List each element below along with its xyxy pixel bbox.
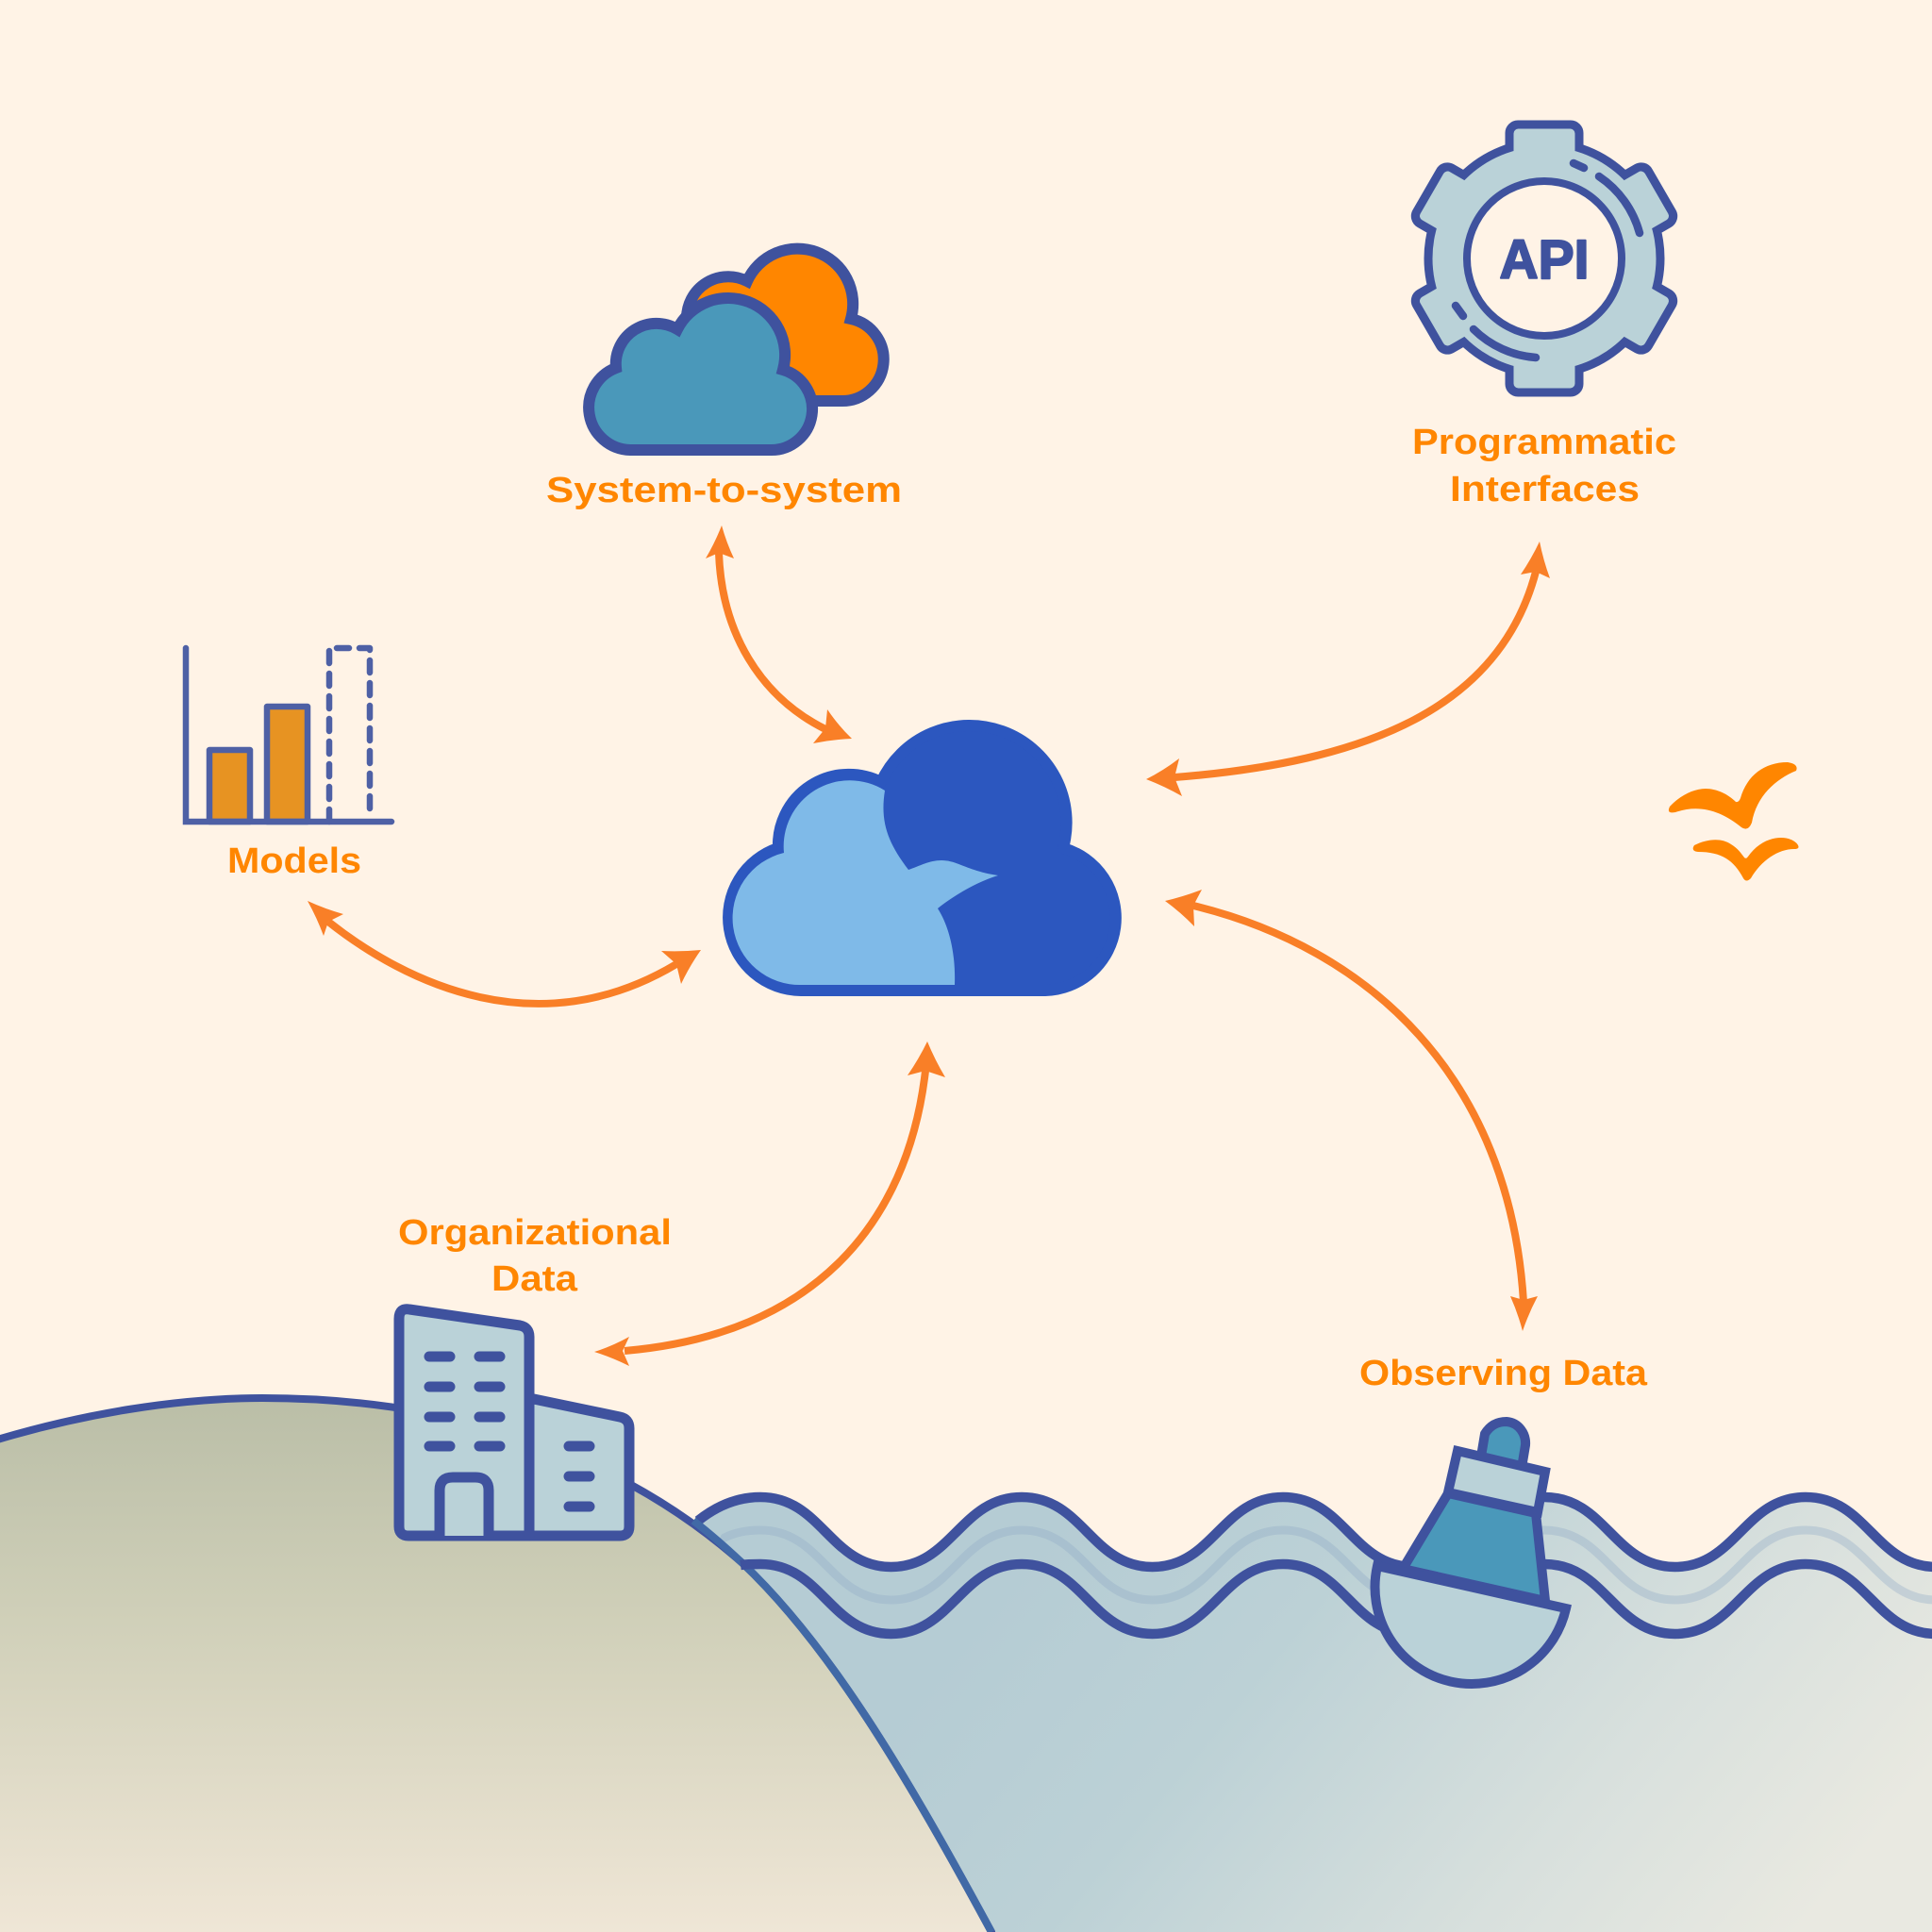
sea xyxy=(698,1497,1932,1932)
hill xyxy=(0,1398,991,1932)
label: organizational data: Organizational xyxy=(398,1213,672,1253)
main building xyxy=(399,1309,529,1536)
icon: office buildings xyxy=(399,1309,629,1536)
buoy collar xyxy=(1448,1451,1545,1512)
water body xyxy=(698,1497,1932,1932)
label: programmatic interfaces: Interfaces xyxy=(1450,470,1640,509)
gear fill xyxy=(1418,128,1671,389)
buoy hull xyxy=(1375,1566,1566,1684)
icon: bar chart models xyxy=(186,648,391,822)
arrow: organizational data and cloud xyxy=(594,1041,945,1366)
icon: API gear xyxy=(1412,125,1676,392)
label: organizational data: Data xyxy=(491,1259,578,1299)
label: models: Models xyxy=(227,841,361,881)
label: organizational data xyxy=(398,1213,672,1299)
windows xyxy=(429,1357,590,1507)
label: programmatic interfaces xyxy=(1412,423,1676,509)
cloud light area xyxy=(733,780,998,985)
arrow: system-to-system and cloud xyxy=(706,525,852,743)
orange cloud xyxy=(687,249,884,401)
gear highlights xyxy=(1456,163,1640,358)
label: system-to-system: System-to-system xyxy=(546,471,902,510)
top wave line xyxy=(698,1497,1932,1567)
arrow: models and cloud xyxy=(308,901,701,1004)
icon: two clouds xyxy=(589,249,884,450)
icon: birds xyxy=(1669,762,1798,881)
second wave line xyxy=(741,1564,1932,1634)
label: observing data: Observing Data xyxy=(1359,1354,1648,1393)
arrow: programmatic interfaces and cloud xyxy=(1146,541,1550,796)
gear inner circle xyxy=(1467,181,1622,336)
blue cloud xyxy=(589,298,812,450)
door xyxy=(440,1477,489,1536)
label: programmatic interfaces: Programmatic xyxy=(1412,423,1676,462)
faint middle wave xyxy=(724,1530,1932,1600)
arrow: observing data and cloud xyxy=(1165,890,1538,1331)
lower bird xyxy=(1693,838,1798,881)
gear outline xyxy=(1412,125,1676,392)
bars xyxy=(209,707,308,822)
dashed forecast bar xyxy=(329,648,370,822)
API text: API xyxy=(1500,229,1589,291)
axes xyxy=(186,648,391,822)
buoy body xyxy=(1403,1493,1545,1601)
central cloud xyxy=(728,725,1116,991)
right building xyxy=(529,1398,629,1536)
buoy dome xyxy=(1481,1422,1525,1468)
hill body xyxy=(0,1398,991,1932)
upper bird xyxy=(1669,762,1797,829)
icon: buoy xyxy=(1375,1422,1566,1684)
cloud outline xyxy=(728,725,1116,991)
lower hill edge xyxy=(693,1521,991,1932)
